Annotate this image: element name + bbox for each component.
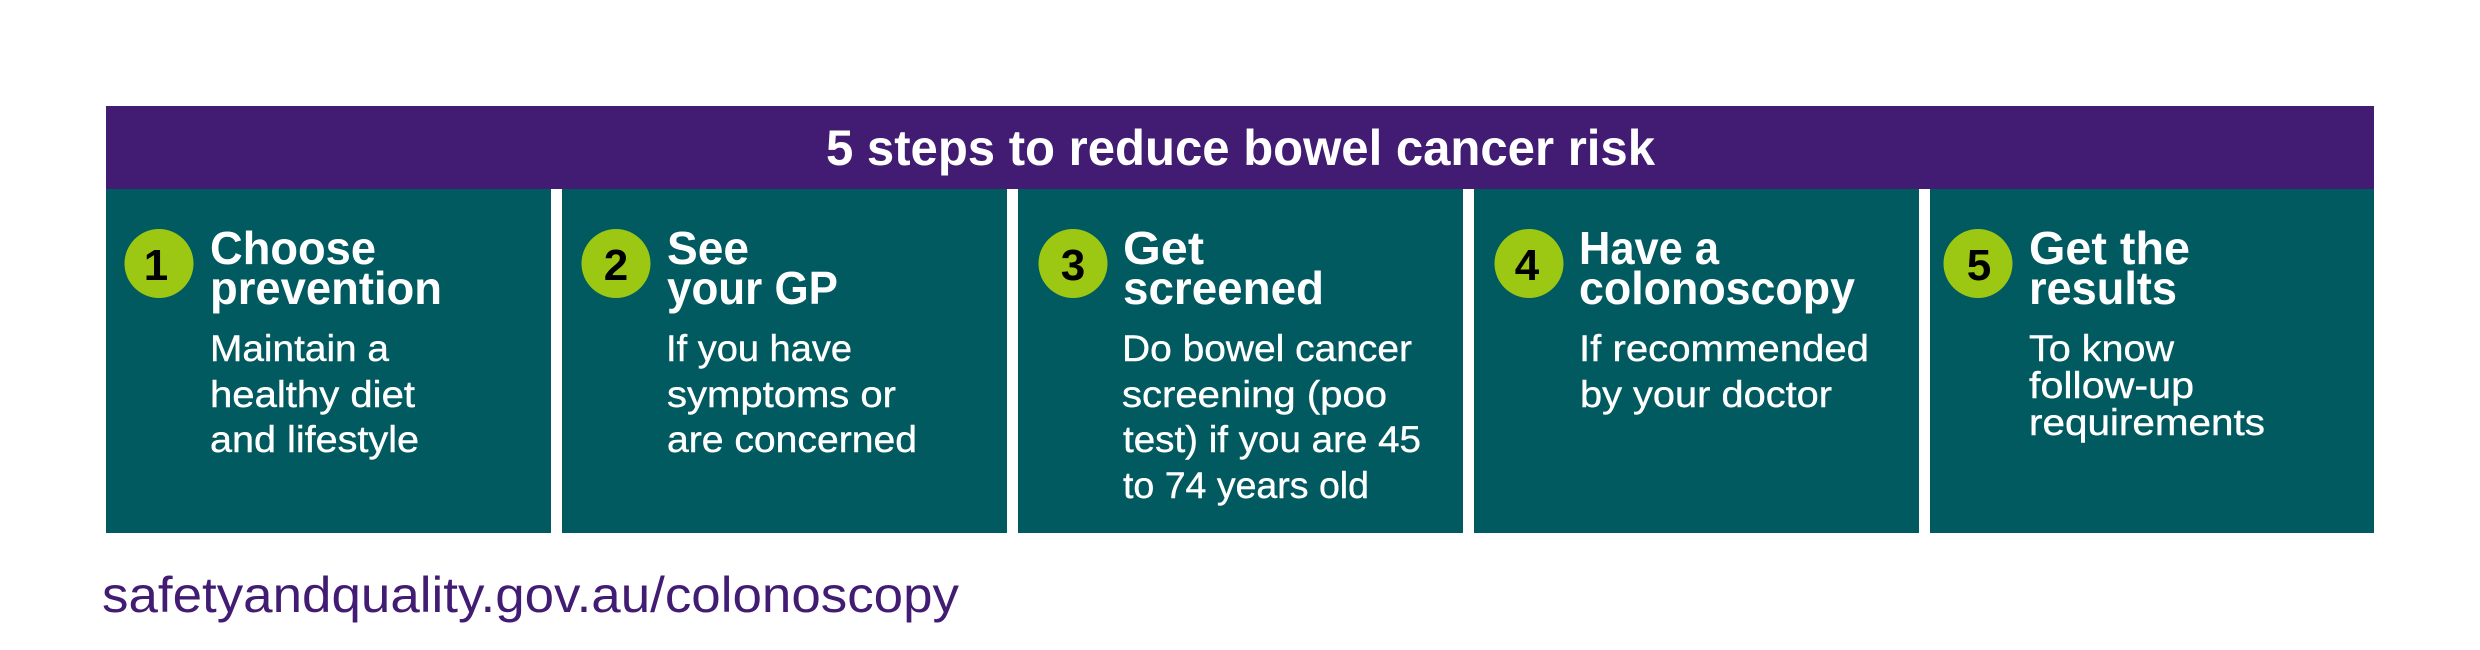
heading: get the results xyxy=(2029,222,2190,314)
text: step 3 description: test) if you are 45 xyxy=(1123,419,1421,460)
heading: choose prevention: prevention xyxy=(210,262,442,314)
panel: step 3 get screened xyxy=(1018,189,1463,533)
heading: get the results: Get the xyxy=(2029,222,2190,274)
heading: get the results: results xyxy=(2029,262,2177,314)
text: step 5 description: To know xyxy=(2029,328,2174,369)
website link: safetyandquality.gov.au/colonoscopy xyxy=(102,567,959,623)
text: step 1 description xyxy=(210,328,419,460)
icon: number 2 xyxy=(582,229,650,298)
panel: step 4 have a colonoscopy xyxy=(1474,189,1919,533)
heading: have a colonoscopy: colonoscopy xyxy=(1579,262,1855,314)
heading: get screened: screened xyxy=(1123,262,1324,314)
text: step 2 description: are concerned xyxy=(667,419,917,460)
icon: number 4 xyxy=(1494,229,1564,298)
text: step 3 description: to 74 years old xyxy=(1123,465,1369,506)
heading: see your GP: your GP xyxy=(667,262,838,314)
heading: choose prevention xyxy=(210,222,442,314)
text: step 3 description: screening (poo xyxy=(1122,374,1387,415)
text: step 1 description: Maintain a xyxy=(210,328,389,369)
heading: have a colonoscopy: Have a xyxy=(1579,222,1719,274)
panel: step 2 see your GP xyxy=(562,189,1007,533)
panel: step 1 choose prevention xyxy=(106,189,551,533)
heading: get screened xyxy=(1123,222,1324,314)
text: step 2 description: If you have xyxy=(666,328,852,369)
text: step 5 description: requirements xyxy=(2029,402,2265,443)
text: step 3 description xyxy=(1122,328,1421,506)
icon: number 5: 5 xyxy=(1967,241,1991,290)
icon: number 4: 4 xyxy=(1515,241,1540,290)
heading: get screened: Get xyxy=(1123,222,1204,274)
text: step 2 description xyxy=(666,328,917,460)
text: step 5 description xyxy=(2029,328,2265,443)
icon: number 1 xyxy=(124,229,194,298)
heading: see your GP: See xyxy=(667,222,749,274)
text: step 2 description: symptoms or xyxy=(667,374,896,415)
icon: number 3 xyxy=(1038,229,1108,298)
text: step 5 description: follow-up xyxy=(2029,365,2194,406)
icon: number 2: 2 xyxy=(604,241,628,290)
icon: number 5 xyxy=(1944,229,2012,298)
text: step 4 description: by your doctor xyxy=(1580,374,1832,415)
icon: number 1: 1 xyxy=(144,241,168,290)
title banner xyxy=(106,106,2374,189)
heading: see your GP xyxy=(667,222,838,314)
text: step 3 description: Do bowel cancer xyxy=(1122,328,1412,369)
text: step 4 description xyxy=(1579,328,1869,415)
text: step 4 description: If recommended xyxy=(1579,328,1869,369)
heading: have a colonoscopy xyxy=(1579,222,1855,314)
text: step 1 description: healthy diet xyxy=(210,374,416,415)
panel: step 5 get the results xyxy=(1930,189,2374,533)
heading: choose prevention: Choose xyxy=(210,222,376,274)
icon: number 3: 3 xyxy=(1061,241,1085,290)
text: step 1 description: and lifestyle xyxy=(210,419,419,460)
title: 5 steps to reduce bowel cancer risk xyxy=(826,120,1655,176)
